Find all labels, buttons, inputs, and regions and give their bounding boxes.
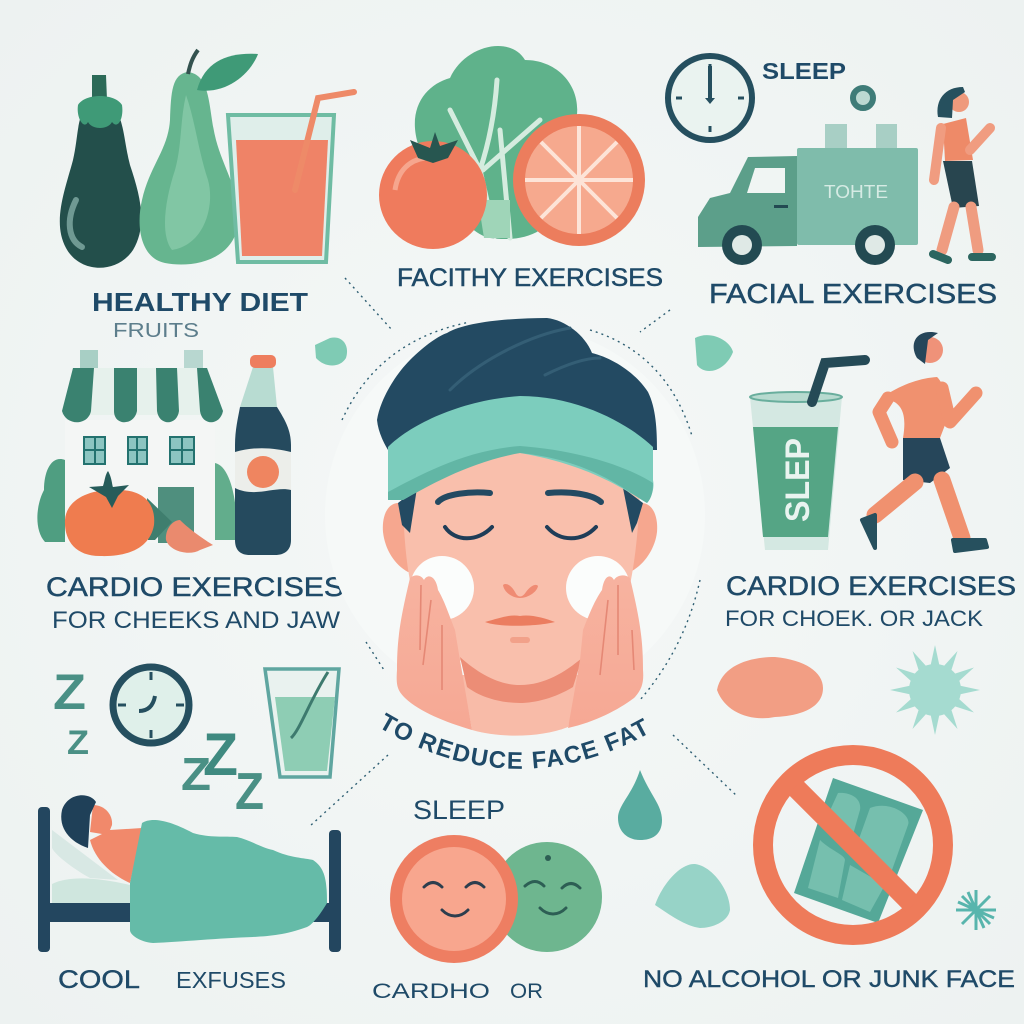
icon: running man <box>862 332 987 551</box>
icon: small teal blob right <box>695 335 733 371</box>
icon: citrus slice <box>513 114 645 246</box>
right hand <box>568 575 643 728</box>
icon: juice glass <box>228 92 354 262</box>
icon: z letter upper: Z <box>53 664 86 720</box>
icon: sleeping person in bed <box>38 795 341 952</box>
jaw shadow <box>460 657 582 703</box>
mouth <box>485 615 555 626</box>
icon: green drink cup <box>750 360 865 550</box>
soft glow behind face <box>325 325 705 705</box>
cotton pads <box>410 556 474 620</box>
hair <box>377 318 657 450</box>
icon: teal flower <box>890 645 980 735</box>
eyebrows <box>438 492 601 502</box>
panel: central face <box>315 318 733 769</box>
icon: blocked junk box <box>794 778 923 923</box>
heading: cardio exercises right: CARDIO EXERCISES <box>726 571 1016 601</box>
icon: delivery truck <box>698 124 918 265</box>
icon: right bush <box>215 463 237 540</box>
panel: sleep bottom middle <box>372 770 730 1003</box>
finger lines <box>420 585 634 690</box>
label: for cheeks and jaw: FOR CHEEKS AND JAW <box>52 607 340 634</box>
heading: facilthy exercises: FACITHY EXERCISES <box>397 264 663 292</box>
label: cardho: CARDHO <box>372 980 490 1003</box>
icon: orange smiling circle <box>390 835 518 963</box>
headband shade <box>388 446 653 503</box>
sideburns <box>398 488 643 533</box>
hair highlights <box>450 328 600 390</box>
icon: small teal blob left <box>315 337 347 366</box>
icon: water drop <box>618 770 662 840</box>
neck <box>462 675 582 736</box>
chin mark <box>510 637 530 643</box>
icon: pear <box>140 50 258 265</box>
face <box>402 440 640 686</box>
icon: z letter lower: Z <box>67 724 89 762</box>
icon: teal snowflake <box>956 890 996 930</box>
icon: bedside clock <box>113 667 189 743</box>
icon: tomato apple <box>379 132 487 249</box>
icon: small ring <box>853 88 873 108</box>
icon: soda bottle <box>235 355 291 555</box>
icon: delivery truck: TOHTE <box>824 182 888 202</box>
dashed circle around face <box>310 278 738 826</box>
label: exfuses: EXFUSES <box>176 967 286 993</box>
icon: left bush <box>37 459 65 542</box>
heading: healthy diet: HEALTHY DIET <box>92 287 308 317</box>
icon: large z letters: Z <box>235 763 264 821</box>
heading: cardio exercises left: CARDIO EXERCISES <box>46 572 344 602</box>
icon: water glass <box>265 669 339 777</box>
label: or: OR <box>510 980 543 1003</box>
ear right <box>615 503 657 573</box>
icon: wall clock <box>668 56 752 140</box>
panel: healthy diet <box>60 50 354 342</box>
panel: fruit and vegetables <box>379 46 663 292</box>
label: fruits: FRUITS <box>113 320 199 342</box>
icon: peach blob <box>717 657 823 718</box>
icon: large z letters: Z <box>203 721 238 788</box>
headband <box>388 396 653 503</box>
panel: store and soda <box>37 350 344 634</box>
heading: to reduce face fat: TO REDUCE FACE FAT <box>382 712 646 769</box>
icon: walking woman <box>933 87 992 260</box>
panel: no alcohol or junk <box>643 755 1015 993</box>
icon: eggplant <box>60 75 141 268</box>
ear left <box>383 503 420 572</box>
icon: prohibition sign <box>763 755 943 935</box>
icon: storefront <box>62 350 223 543</box>
nose <box>503 584 538 598</box>
icon: large z letters <box>181 721 264 821</box>
label: sleep: SLEEP <box>762 58 846 84</box>
heading: facial exercises: FACIAL EXERCISES <box>709 278 997 309</box>
closed eyes <box>445 527 596 538</box>
panel: sleep and facial exercises <box>668 56 997 309</box>
panel: cardio right <box>717 332 1016 735</box>
label: for choek or jack: FOR CHOEK. OR JACK <box>725 606 983 631</box>
icon: leafy greens <box>415 46 577 239</box>
panel: sleep bottom left <box>38 664 341 994</box>
icon: tomato and carrot <box>65 471 213 556</box>
label: sleep: SLEEP <box>413 795 505 825</box>
icon: teal pebble <box>655 864 730 928</box>
left hand <box>397 575 472 730</box>
icon: green smiling circle <box>492 842 602 952</box>
illustration: person with headband <box>377 318 658 769</box>
heading: no alcohol or junk face: NO ALCOHOL OR JUNK FACE <box>643 966 1015 993</box>
icon: green drink cup: SLEP <box>779 438 817 522</box>
icon: large z letters: Z <box>181 748 211 800</box>
label: cool exercises: COOL <box>58 966 140 994</box>
